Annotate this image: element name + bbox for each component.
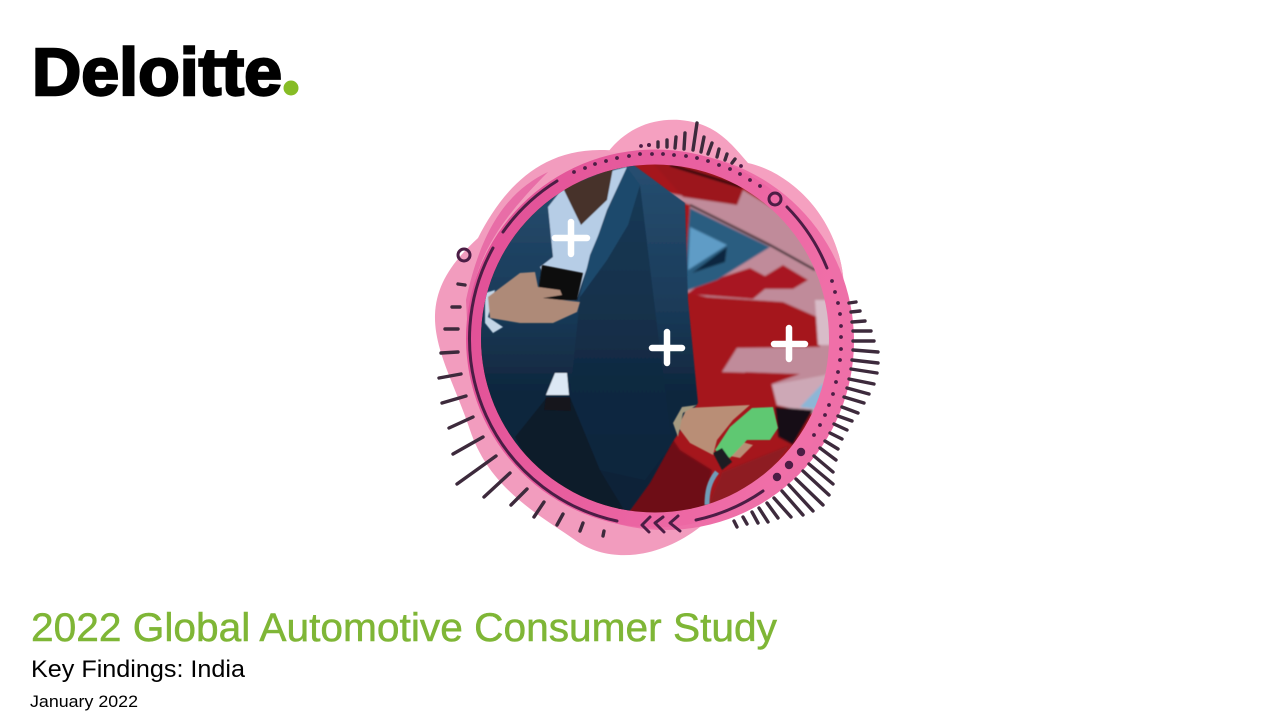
lapel [580, 167, 640, 297]
pink blob backdrop [435, 120, 843, 555]
tick marks [439, 123, 878, 536]
shirt [540, 167, 627, 297]
chevrons [642, 516, 680, 532]
plus hotspots [555, 222, 805, 363]
arc lines [470, 181, 827, 521]
date: January 2022 [30, 692, 138, 711]
charger hand, watch and plug [673, 405, 778, 505]
open circle markers [458, 193, 781, 261]
subtitle: Key Findings: India [31, 656, 246, 683]
title: 2022 Global Automotive Consumer Study [31, 606, 777, 650]
magenta ring [466, 150, 854, 530]
phone and hand [485, 265, 583, 333]
photo: man charging a red electric car [481, 164, 829, 512]
Deloitte logo: Deloitte [32, 35, 282, 110]
car body [481, 164, 829, 512]
dots [572, 143, 843, 481]
man: jacket [481, 166, 699, 511]
hero badge: circular photo with pink blobs and ticks [435, 120, 878, 555]
